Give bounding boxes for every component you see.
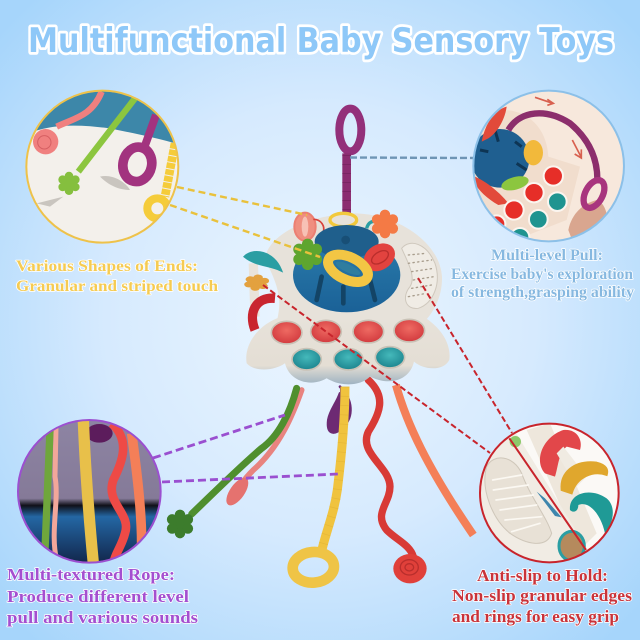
caption: multi-level pull: of strength,grasping ability (451, 284, 634, 301)
pink rope and spiral (33, 92, 102, 154)
dashed connector line: blue (350, 156, 474, 159)
pink rope (54, 427, 57, 560)
divider diagonal (509, 438, 586, 550)
yellow gear ring (562, 462, 607, 493)
rope: green with flower end (167, 388, 297, 538)
blue dome (293, 225, 400, 312)
toy body (243, 109, 450, 384)
hanging ring and purple rope (339, 109, 361, 225)
cream plate (473, 110, 580, 243)
panel: multi-textured rope (18, 420, 161, 563)
caption: multi-textured rope (7, 565, 198, 627)
caption: anti-slip to hold: Non-slip granular edges (452, 586, 633, 605)
rope: purple stub (328, 387, 350, 432)
panel: anti-slip to hold (477, 423, 619, 570)
green rope (45, 430, 50, 550)
yellow blob (524, 140, 543, 165)
yellow rope (147, 143, 175, 218)
teal buttons (512, 192, 568, 238)
grip pad (485, 458, 552, 543)
orange flower (372, 210, 398, 238)
dashed connector lines: red (263, 278, 512, 453)
direction arrows (535, 97, 581, 158)
panel: various shapes of ends (20, 90, 187, 243)
yellow beaded rope (83, 420, 93, 563)
green disc (501, 176, 529, 190)
dashed connector lines: yellow (170, 187, 320, 257)
caption: anti-slip to hold: Anti-slip to Hold: (477, 566, 608, 585)
teal pop buttons (292, 347, 405, 370)
caption: multi-level pull: Multi-level Pull: (491, 247, 603, 264)
caption: anti-slip to hold (452, 566, 633, 626)
green dot (510, 436, 521, 447)
red pop buttons (271, 319, 425, 344)
rope: orange segmented (396, 385, 473, 535)
rope: pink with ribbed end (222, 390, 302, 509)
purple ring (120, 115, 156, 184)
yellow ring end (324, 249, 372, 288)
dashed connector lines: purple (153, 415, 338, 482)
caption: multi-textured rope: Multi-textured Rope: (7, 565, 175, 584)
caption: multi-textured rope: pull and various sounds (7, 608, 198, 627)
side rings on stem (243, 252, 281, 330)
caption: multi-level pull (451, 247, 634, 301)
orange and blue peek (537, 492, 562, 517)
purple ring behind ropes (86, 424, 113, 443)
near side with grip (481, 434, 588, 562)
back toys on plate (294, 213, 377, 241)
caption: various shapes of ends: Various Shapes of Ends: (16, 258, 198, 275)
rope: red wavy with disc end (366, 380, 427, 583)
red wavy rope (112, 423, 126, 563)
purple pull rope and ring (508, 113, 609, 211)
caption: multi-textured rope: Produce different level (7, 587, 189, 606)
caption: anti-slip to hold: and rings for easy grip (452, 607, 619, 626)
rope: yellow beaded with ring end (291, 387, 345, 584)
grip area (402, 243, 437, 308)
panel: multi-level pull (471, 91, 624, 247)
upper plate (265, 213, 442, 323)
red oval end (358, 238, 400, 277)
red gear ring (540, 430, 581, 477)
toy ropes below the body (167, 380, 473, 584)
shadows (37, 176, 130, 207)
hand (568, 200, 606, 237)
dome backdrop (36, 92, 174, 143)
green rope and flower (78, 98, 135, 172)
lower body with lobes (246, 317, 450, 384)
caption: various shapes of ends (16, 258, 218, 295)
green flower end (293, 239, 322, 270)
caption: multi-level pull: Exercise baby's exploration (451, 266, 633, 283)
orange rope (132, 433, 142, 543)
teal-brown ring (559, 531, 584, 561)
blue ball (471, 129, 529, 188)
red parts (475, 107, 508, 205)
red buttons (493, 166, 564, 226)
cream stem and plate (527, 423, 597, 550)
caption: various shapes of ends: Granular and striped touch (16, 278, 218, 295)
grip ribs (493, 475, 542, 532)
teal ring (570, 492, 613, 533)
